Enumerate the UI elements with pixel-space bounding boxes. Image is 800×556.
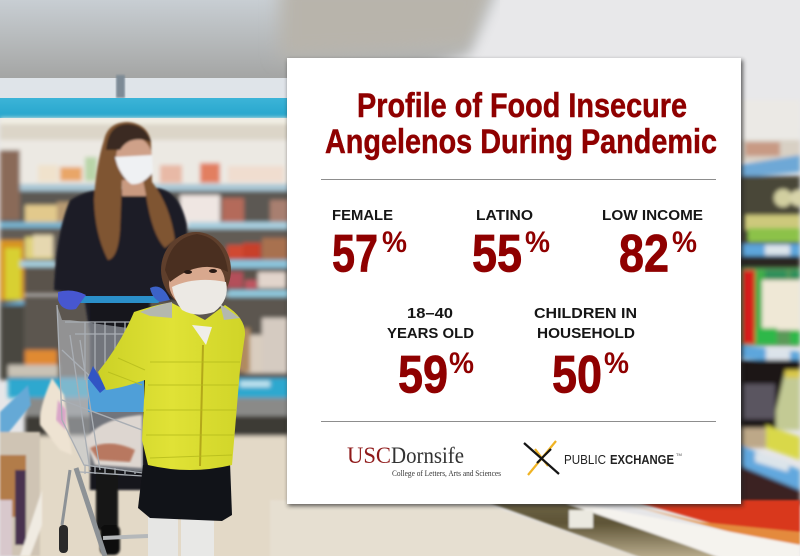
stat: low income: LOW INCOME	[602, 208, 703, 224]
stat: 18-40 years old: 59	[398, 346, 448, 404]
ceiling hanger	[116, 75, 125, 98]
stat: latino: %	[525, 226, 550, 259]
woman face	[116, 137, 152, 179]
stat: latino: 55	[472, 224, 522, 284]
stat: female: %	[382, 226, 407, 259]
cart frame	[62, 468, 148, 556]
fridge	[8, 378, 290, 398]
icon: crossed X mark	[524, 441, 559, 475]
cart wheel	[59, 525, 68, 553]
floor shelf bottom right	[490, 500, 800, 556]
stat: latino	[472, 208, 550, 284]
right shelving	[738, 100, 800, 505]
cart handle	[78, 296, 160, 303]
gloves	[58, 291, 86, 310]
blue shelf header	[0, 98, 290, 118]
logo: USC Dornsife: Dornsife	[391, 443, 464, 468]
woman neck	[122, 180, 146, 196]
stat: female: FEMALE	[332, 208, 393, 224]
panel shadow	[288, 60, 743, 506]
stat: 18-40 years old	[387, 306, 474, 404]
girl mask	[172, 280, 227, 315]
logo: USC Dornsife	[347, 443, 501, 478]
logo: Public Exchange: TM	[676, 452, 682, 457]
floor	[20, 436, 290, 556]
stat: children in household	[534, 306, 637, 404]
woman body	[54, 188, 187, 335]
shopping cart	[40, 286, 170, 556]
stat: children in household: 50	[552, 346, 602, 404]
stat: low income: %	[672, 226, 697, 259]
white panel	[287, 58, 741, 504]
stat: low income: 82	[619, 224, 669, 284]
products	[60, 167, 82, 181]
ceiling	[0, 0, 800, 130]
floor right	[270, 500, 647, 556]
upper wall band	[0, 78, 287, 98]
logo: Public Exchange: PUBLIC	[564, 452, 606, 467]
title: Angelenos During Pandemic	[325, 123, 717, 161]
woman mask	[115, 155, 153, 184]
girl skirt	[138, 462, 232, 521]
stat: low income	[602, 208, 703, 284]
girl collar	[140, 302, 240, 320]
woman hair	[94, 122, 175, 260]
girl jacket	[98, 303, 245, 470]
girl legs	[148, 516, 178, 556]
girl	[98, 232, 245, 556]
stat: 18-40 years old: 18–40	[407, 306, 453, 322]
left display bins	[0, 385, 42, 556]
stat: latino: LATINO	[476, 208, 533, 224]
logo: Public Exchange	[524, 441, 682, 475]
logo: USC Dornsife: College of Letters, Arts and Sciences	[392, 468, 501, 478]
stat: female: 57	[332, 224, 378, 284]
title: Profile of Food Insecure	[357, 87, 687, 125]
logo: USC Dornsife: USC	[347, 443, 391, 468]
stat: 18-40 years old: %	[449, 347, 474, 380]
stat: children in household: CHILDREN IN	[534, 306, 637, 322]
stat: 18-40 years old: YEARS OLD	[387, 326, 474, 342]
logo: Public Exchange: EXCHANGE	[610, 452, 674, 467]
girl head	[161, 232, 231, 308]
stat: children in household: HOUSEHOLD	[537, 326, 635, 342]
shelf edges	[20, 184, 290, 191]
woman legs	[96, 470, 118, 530]
left shelving unit	[0, 118, 290, 556]
stat: female	[332, 208, 407, 284]
woman	[54, 122, 187, 555]
title	[325, 87, 717, 161]
stat: children in household: %	[604, 347, 629, 380]
